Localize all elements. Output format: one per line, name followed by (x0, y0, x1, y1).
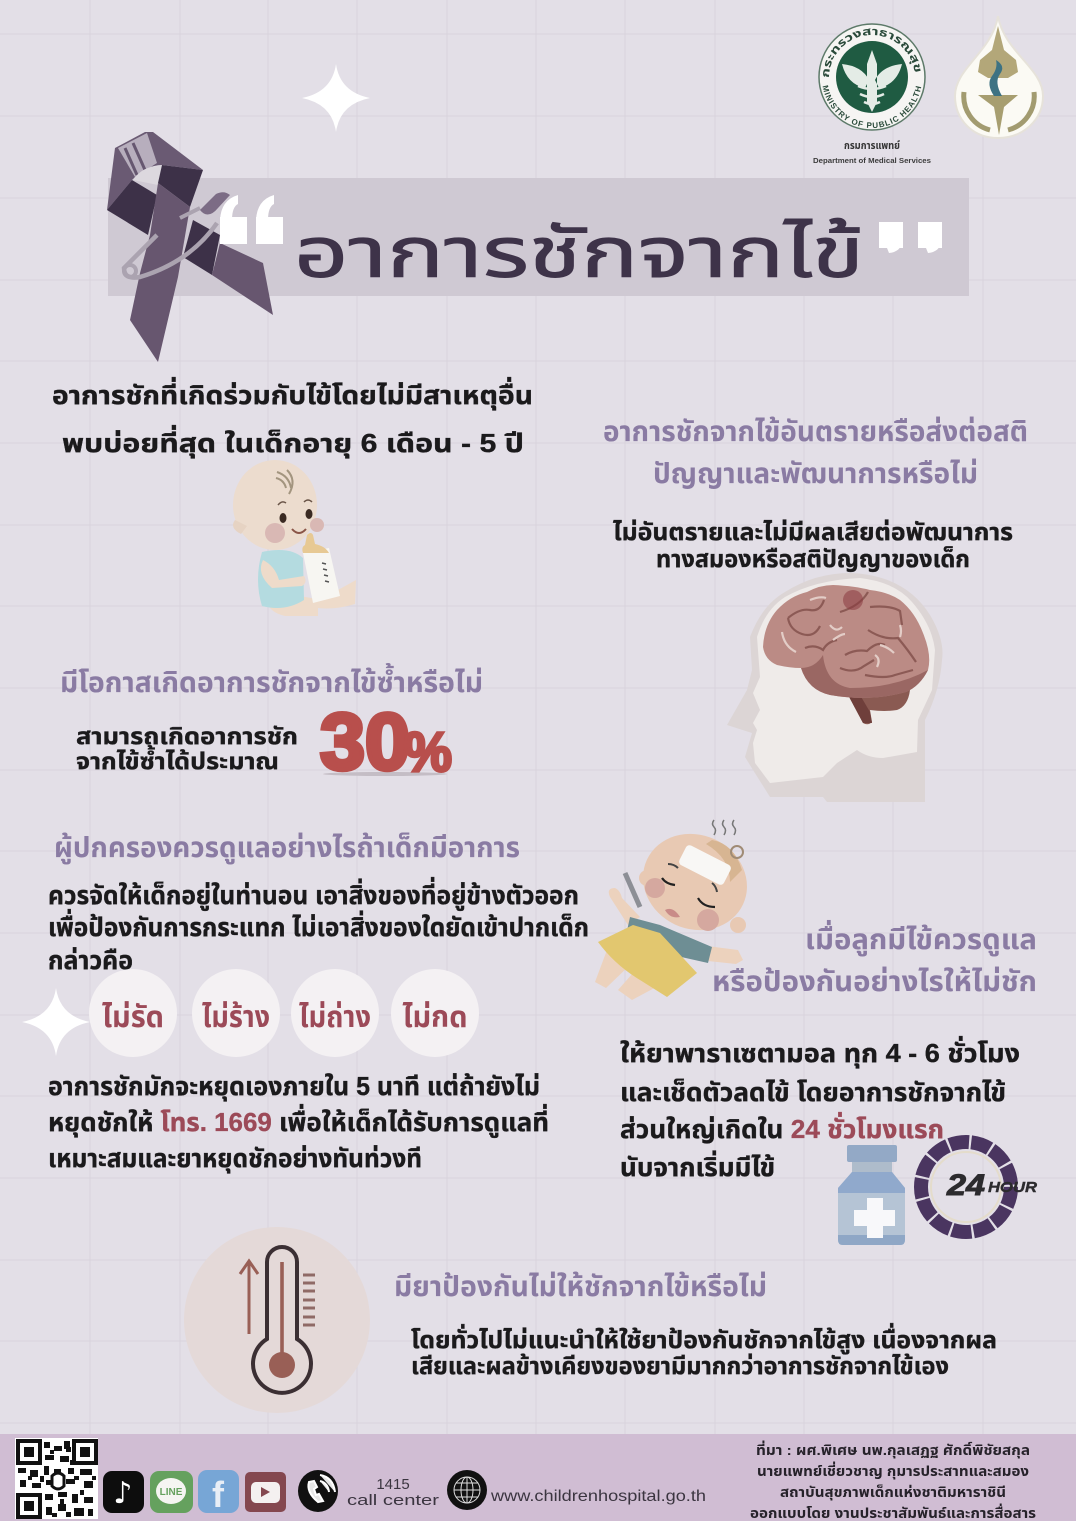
badge: do not press: ไม่กด (402, 1001, 468, 1034)
text: when to call: อาการชักมักจะหยุดเองภายใน 5 นาที แต่ถ้ายังไม่ (48, 1071, 540, 1102)
text: call center: call center (347, 1492, 439, 1509)
icon: head and brain (727, 573, 942, 802)
icon: 24 hour clock (921, 1142, 1037, 1232)
badge: do not press (391, 969, 479, 1057)
text: recurrence (76, 723, 298, 774)
heading: danger: อาการชักจากไข้อันตรายหรือส่งต่อสติ (603, 416, 1028, 447)
logo: Ministry of Public Health (813, 23, 931, 165)
text: source credits: ออกแบบโดย งานประชาสัมพันธ์และการสื่อสาร (750, 1503, 1036, 1521)
icon: baby with bottle (233, 460, 356, 616)
icon: Facebook (198, 1470, 239, 1515)
text: prophylaxis (411, 1323, 997, 1380)
icon: top sparkle (302, 64, 370, 132)
logo: hospital drop emblem (955, 16, 1043, 138)
text: when to call (48, 1071, 549, 1174)
text: caregiver: เพื่อป้องกันการกระแทก ไม่เอาสิ่งของใดยัดเข้าปากเด็ก (48, 909, 589, 942)
footer band (0, 1434, 1076, 1521)
text: call center: 1415 (376, 1476, 410, 1493)
icon: 24 hour clock: 24 (946, 1169, 985, 1202)
icon: QR code (15, 1438, 98, 1519)
figure: 30 percent: % (404, 720, 452, 783)
badge: do not scold (192, 969, 280, 1057)
icon: phone (298, 1470, 338, 1512)
icon: awareness ribbon (107, 132, 273, 362)
heading: prevention (712, 919, 1037, 997)
closing quote (879, 222, 942, 253)
logo: Ministry of Public Health: MINISTRY OF PUBLIC HEALTH (822, 85, 922, 128)
text: prevention: ให้ยาพาราเซตามอล ทุก 4 - 6 ชั่วโมง (620, 1036, 1020, 1069)
heading: danger (603, 416, 1028, 489)
text: danger (613, 518, 1013, 573)
icon: TikTok: ♪ (113, 1476, 133, 1511)
text: source credits: สถาบันสุขภาพเด็กแห่งชาติมหาราชินี (780, 1484, 1006, 1501)
icon: YouTube (245, 1472, 286, 1512)
badge: do not pry: ไม่ถ่าง (299, 1001, 371, 1034)
figure: 30 percent: 30 (320, 697, 410, 786)
icon: Facebook: f (212, 1474, 225, 1515)
text: intro: พบบ่อยที่สุด ในเด็กอายุ 6 เดือน - 5 ปี (62, 425, 524, 459)
text: source credits: นายแพทย์เชี่ยวชาญ กุมารประสาทและสมอง (757, 1461, 1029, 1480)
text: intro: อาการชักที่เกิดร่วมกับไข้โดยไม่มีสาเหตุอื่น (52, 377, 533, 411)
icon: sick baby (595, 817, 763, 1000)
icon: Line (150, 1471, 193, 1513)
heading: อาการชักจากไข้ (294, 214, 864, 292)
figure: 30 percent (320, 697, 452, 786)
text: prevention (620, 1036, 1020, 1182)
badge: do not pry (291, 969, 379, 1057)
badge: do not restrain: ไม่รัด (102, 1001, 164, 1034)
icon: left sparkle (22, 988, 90, 1056)
heading: caregiver: ผู้ปกครองควรดูแลอย่างไรถ้าเด็กมีอาการ (54, 832, 520, 865)
text: recurrence: สามารถเกิดอาการชัก (76, 723, 298, 749)
logo: Ministry of Public Health: กรมการแพทย์ (844, 140, 900, 152)
heading: danger: ปัญญาและพัฒนาการหรือไม่ (653, 458, 978, 489)
text: danger: ไม่อันตรายและไม่มีผลเสียต่อพัฒนาการ (613, 518, 1013, 546)
text: caregiver: กล่าวคือ (48, 945, 133, 975)
opening quote (220, 195, 283, 244)
heading: prevention: หรือป้องกันอย่างไรให้ไม่ชัก (712, 966, 1037, 997)
text: recurrence: จากไข้ซ้ำได้ประมาณ (76, 745, 279, 774)
badge: do not scold: ไม่ร้าง (202, 1001, 270, 1034)
text: prevention: ส่วนใหญ่เกิดใน 24 ชั่วโมงแรก (620, 1112, 944, 1144)
icon: globe (447, 1470, 487, 1510)
logo: Ministry of Public Health: กระทรวงสาธารณสุข (823, 28, 921, 77)
icon: medicine bottle (838, 1145, 905, 1245)
text: source credits: ที่มา : ผศ.พิเศษ นพ.กุลเสฏฐ ศักดิ์พิชัยสกุล (756, 1440, 1030, 1459)
text: prophylaxis: โดยทั่วไปไม่แนะนำให้ใช้ยาป้องกันชักจากไข้สูง เนื่องจากผล (411, 1323, 997, 1355)
icon: thermometer (184, 1227, 370, 1413)
text: when to call: หยุดชักให้ โทร. 1669 เพื่อให้เด็กได้รับการดูแลที่ (48, 1104, 549, 1138)
logo: Ministry of Public Health: Department of Medical Services (813, 156, 931, 165)
title banner (107, 132, 969, 362)
heading: recurrence: มีโอกาสเกิดอาการชักจากไข้ซ้ำหรือไม่ (60, 662, 483, 698)
text: prevention: นับจากเริ่มมีไข้ (620, 1151, 775, 1182)
text: danger: ทางสมองหรือสติปัญญาของเด็ก (656, 546, 970, 573)
text: intro (52, 377, 533, 459)
badge: do not restrain (89, 969, 177, 1057)
text: caregiver: ควรจัดให้เด็กอยู่ในท่านอน เอาสิ่งของที่อยู่ข้างตัวออก (48, 877, 579, 911)
icon: Line: LINE (160, 1487, 183, 1498)
text: prophylaxis: เสียและผลข้างเคียงของยามีมากกว่าอาการชักจากไข้เอง (411, 1352, 949, 1380)
icon: TikTok (103, 1471, 144, 1513)
text: call center (347, 1476, 439, 1509)
heading: prophylaxis: มียาป้องกันไม่ให้ชักจากไข้หรือไม่ (394, 1271, 767, 1302)
heading: prevention: เมื่อลูกมีไข้ควรดูแล (805, 919, 1037, 957)
text: source credits (750, 1440, 1036, 1521)
text: website: www.childrenhospital.go.th (490, 1488, 706, 1505)
text: caregiver (48, 877, 589, 975)
text: when to call: เหมาะสมและยาหยุดชักอย่างทันท่วงที (48, 1143, 422, 1174)
text: prevention: และเช็ดตัวลดไข้ โดยอาการชักจากไข้ (620, 1077, 1006, 1107)
icon: 24 hour clock: HOUR (988, 1179, 1037, 1196)
